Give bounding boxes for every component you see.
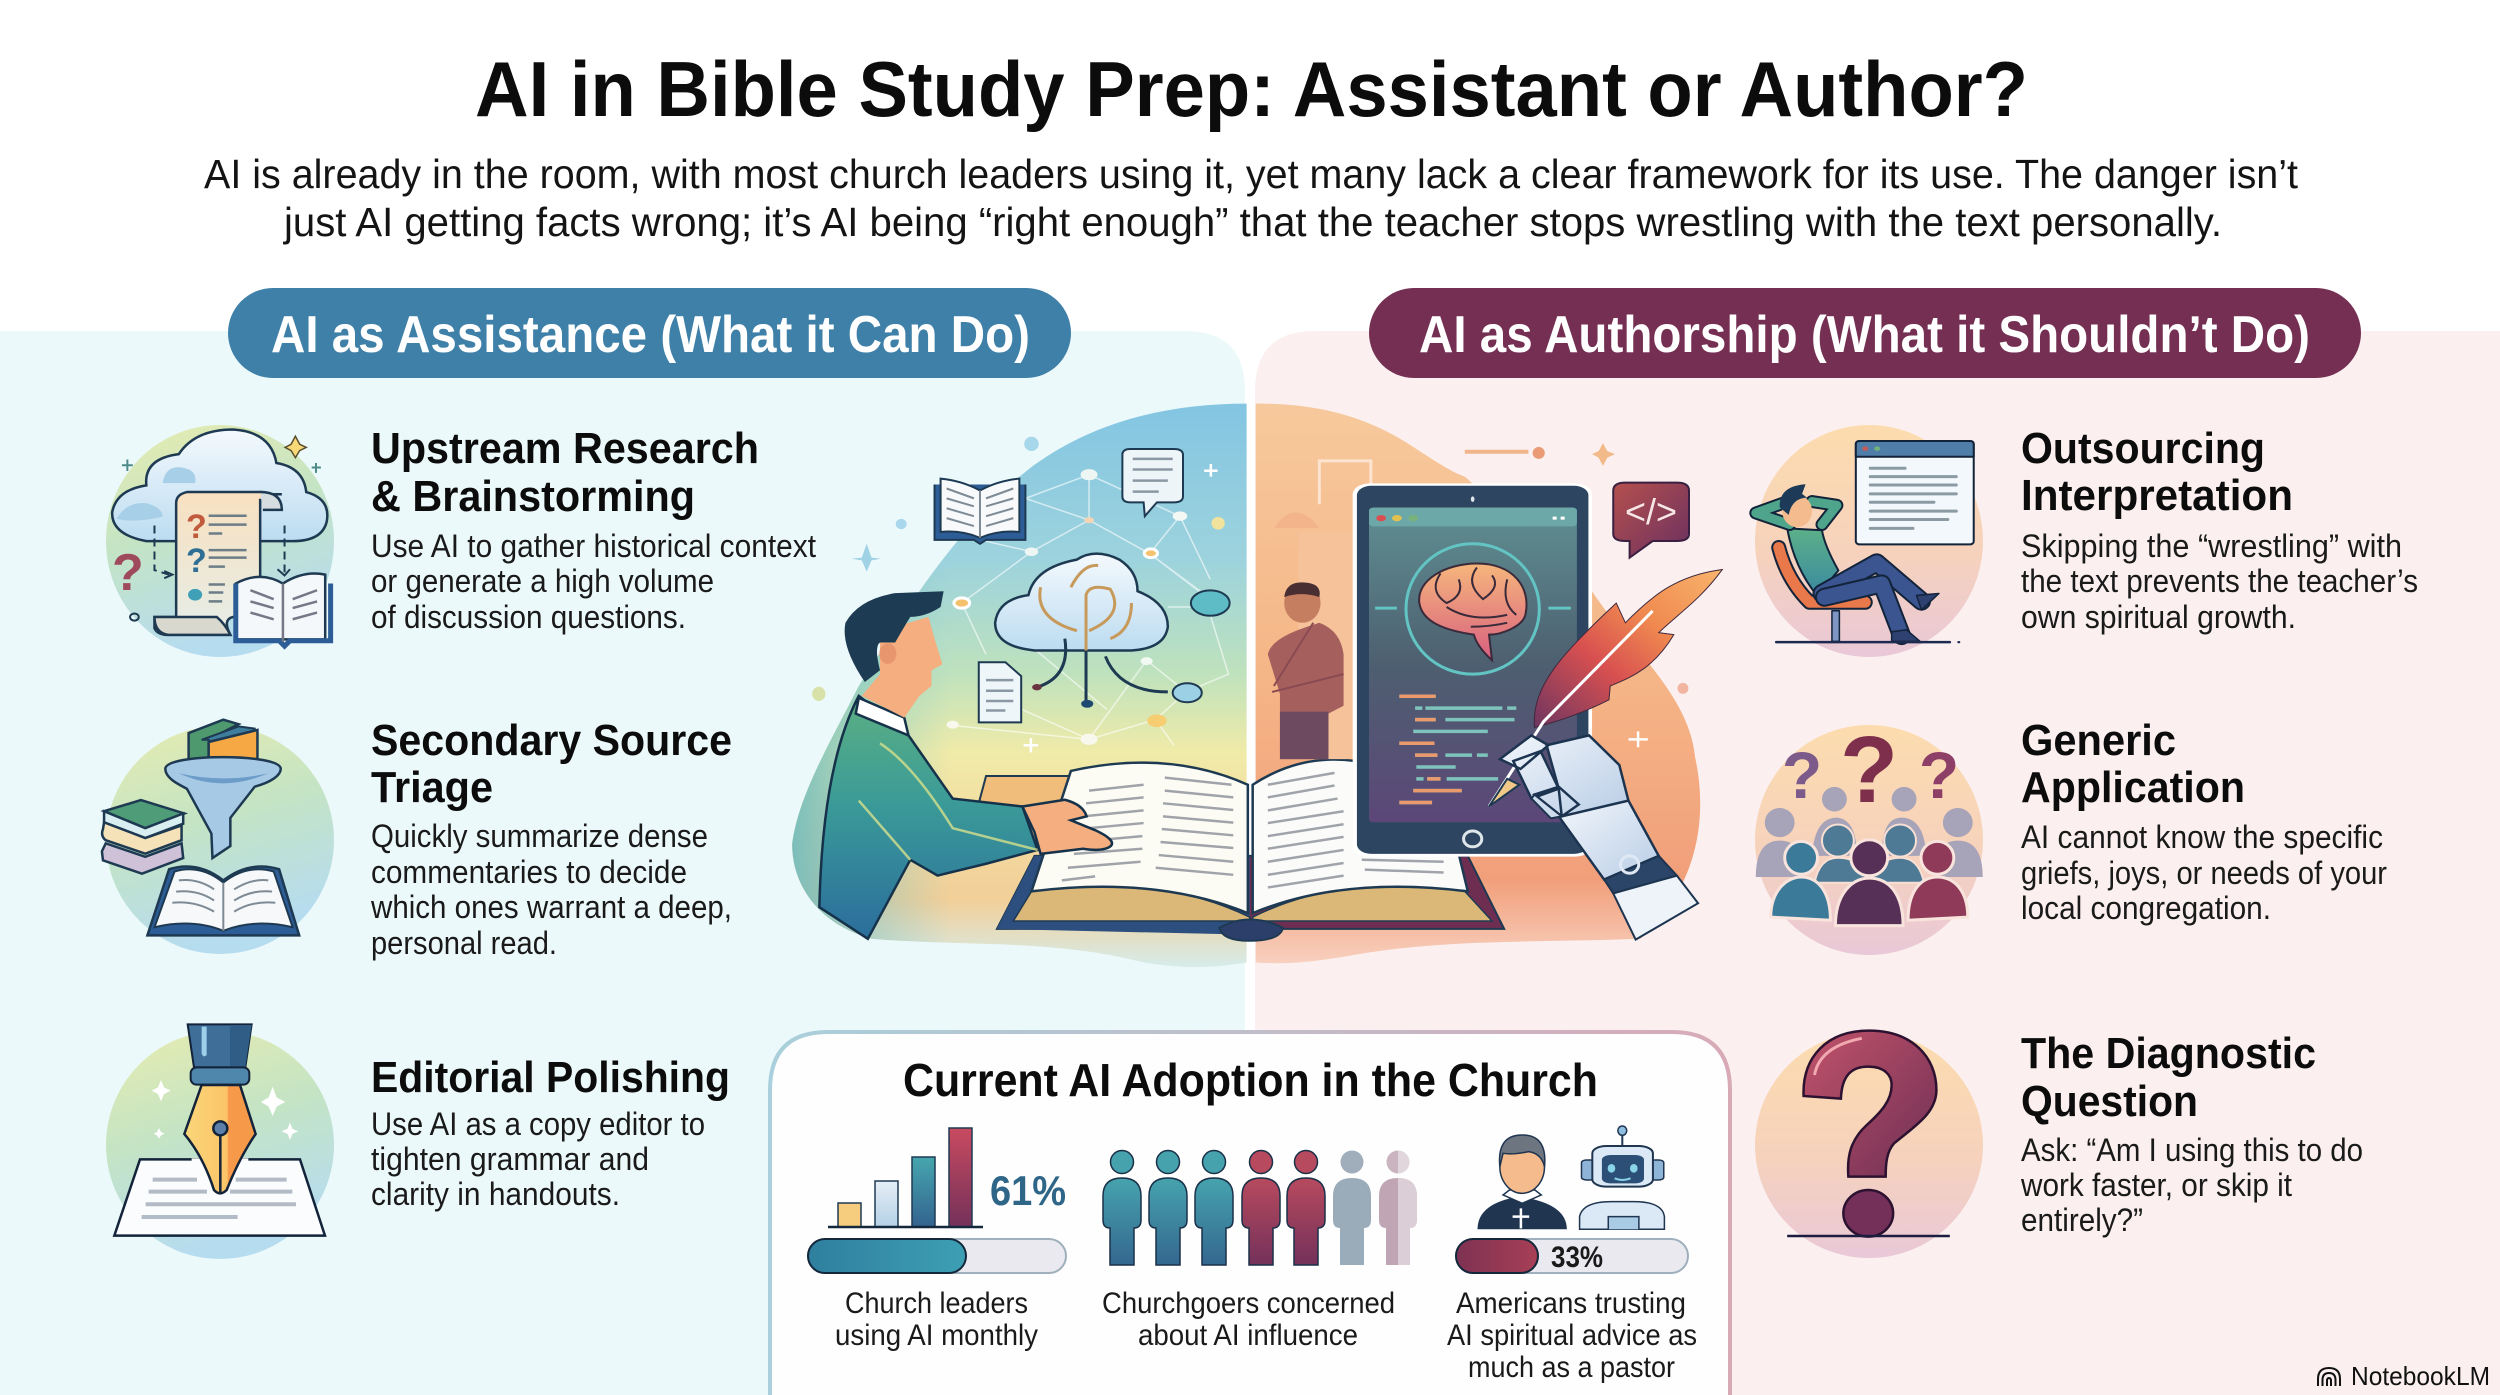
icon: funnel with books <box>102 720 334 954</box>
heading pill: AI as Authorship: AI as Authorship (What it Shouldn’t Do) <box>1419 306 2310 364</box>
icon: document <box>979 662 1021 722</box>
stat: Americans trusting AI 33%: much as a pastor <box>1468 1351 1675 1384</box>
text block: Generic Application <box>2021 716 2387 926</box>
icon: tablet with brain <box>1353 483 1592 857</box>
icon: code speech bubble <box>1613 483 1689 558</box>
subtitle text block <box>204 151 2299 245</box>
text block: Generic Application: local congregation. <box>2021 890 2271 926</box>
icon: chat bubble <box>1122 449 1183 516</box>
text block: Secondary Source Triage: Quickly summarize dense <box>371 818 708 854</box>
stat: church leaders 61%: 61% <box>990 1167 1066 1214</box>
text block: Generic Application: AI cannot know the specific <box>2021 819 2383 855</box>
text block: Editorial Polishing: Editorial Polishing <box>371 1053 730 1102</box>
text block: Outsourcing Interpretation: Outsourcing <box>2021 424 2265 473</box>
stat: Americans trusting AI 33%: 33% <box>1551 1241 1603 1274</box>
text block: Upstream Research: of discussion questions. <box>371 599 686 635</box>
stat: church leaders 61%: Church leaders <box>845 1287 1028 1320</box>
subtitle text block: AI is already in the room, with most church leaders using it, yet many lack a clear framework for its use. The danger isn’t <box>204 151 2299 197</box>
icon: congregation with question marks: ? <box>1782 738 1822 812</box>
stat: church leaders 61%: using AI monthly <box>835 1319 1038 1352</box>
text block: The Diagnostic Question: Ask: “Am I using this to do <box>2021 1132 2363 1168</box>
stat: churchgoers concerned pictogram: about AI influence <box>1138 1319 1358 1352</box>
text block: Secondary Source Triage: commentaries to decide <box>371 854 687 890</box>
heading pill: AI as Assistance: AI as Assistance (What it Can Do) <box>271 306 1030 364</box>
text block: Upstream Research: Upstream Research <box>371 424 759 473</box>
icon: fountain pen on paper <box>106 1024 334 1259</box>
text block: The Diagnostic Question: entirely?” <box>2021 1202 2143 1238</box>
icon: diagnostic question mark <box>1755 1031 1983 1258</box>
icon: relaxed person with document <box>1755 425 1983 657</box>
text block: Outsourcing Interpretation <box>2021 424 2418 635</box>
icon: open book floating <box>935 479 1025 544</box>
decorative sparks: authorship side <box>1465 443 1688 747</box>
text block: Secondary Source Triage: personal read. <box>371 925 557 961</box>
text block: The Diagnostic Question <box>2020 1029 2363 1238</box>
icon: congregation with question marks: ? <box>1919 738 1959 812</box>
icon: cloud research scroll: ? <box>186 542 207 580</box>
text block: Outsourcing Interpretation: own spiritual growth. <box>2021 599 2296 635</box>
text block: The Diagnostic Question: The Diagnostic <box>2021 1029 2316 1078</box>
icon: feather quill <box>1489 569 1722 806</box>
text block: Upstream Research: Use AI to gather historical context <box>371 528 816 564</box>
text block: Editorial Polishing: tighten grammar and <box>371 1141 649 1177</box>
background blob: authorship side <box>1256 404 1700 963</box>
panel: current AI adoption card <box>770 1032 1730 1395</box>
stat: Americans trusting AI 33%: AI spiritual advice as <box>1447 1319 1697 1352</box>
figure: thinking person silhouette <box>1268 461 1371 759</box>
central illustration: assistant and author: </> <box>1625 491 1677 532</box>
stat: churchgoers concerned pictogram: Churchgoers concerned <box>1102 1287 1395 1320</box>
icon: cloud with connections <box>995 554 1168 708</box>
text block: Secondary Source Triage <box>370 716 732 961</box>
text block: Outsourcing Interpretation: Interpretation <box>2021 471 2293 520</box>
central illustration: assistant and author <box>792 404 1722 967</box>
network graph <box>812 437 1230 752</box>
heading pill: AI as Authorship <box>1369 288 2361 378</box>
panel: authorship background <box>1255 331 2500 1395</box>
text block: Generic Application: griefs, joys, or needs of your <box>2021 855 2387 891</box>
text block: Secondary Source Triage: which ones warrant a deep, <box>370 889 732 925</box>
text block: Secondary Source Triage: Secondary Source <box>371 716 732 765</box>
text block: Editorial Polishing <box>371 1053 730 1212</box>
stat: Americans trusting AI 33% <box>1447 1126 1697 1384</box>
text block: Outsourcing Interpretation: the text prevents the teacher’s <box>2021 563 2418 599</box>
text block: Editorial Polishing: clarity in handouts. <box>371 1176 620 1212</box>
card heading: Current AI Adoption in the Church <box>903 1054 1598 1106</box>
text block: The Diagnostic Question: Question <box>2021 1077 2198 1126</box>
text block: Editorial Polishing: Use AI as a copy editor to <box>371 1106 705 1142</box>
icon: robot hand <box>1500 735 1698 940</box>
stat: churchgoers concerned pictogram <box>1102 1150 1417 1352</box>
text block: Generic Application: Generic <box>2021 716 2176 765</box>
background blob: assistance side <box>792 404 1247 967</box>
text block: Secondary Source Triage: Triage <box>371 763 493 812</box>
icon: congregation with question marks: ? <box>1840 717 1898 823</box>
text block: Generic Application: Application <box>2021 763 2245 812</box>
NotebookLM watermark: NotebookLM <box>2351 1361 2490 1391</box>
icon: congregation with question marks <box>1755 717 1983 955</box>
text block: Outsourcing Interpretation: Skipping the “wrestling” with <box>2021 528 2402 564</box>
open Bible <box>997 759 1504 941</box>
panel: assistance background <box>0 331 1245 1395</box>
icon: cloud research scroll: ? <box>112 544 144 602</box>
icon: cloud research scroll: ? <box>186 508 207 546</box>
text block: Upstream Research: or generate a high volume <box>371 563 714 599</box>
title: AI in Bible Study Prep: Assistant or Author? <box>475 45 2028 133</box>
stat: church leaders 61% <box>808 1128 1066 1352</box>
subtitle text block: just AI getting facts wrong; it’s AI being “right enough” that the teacher stops wrestling with the text personally. <box>283 199 2222 245</box>
figure: man studying <box>819 591 1071 939</box>
text block: Upstream Research: & Brainstorming <box>371 472 695 521</box>
text block: The Diagnostic Question: work faster, or skip it <box>2020 1167 2292 1203</box>
icon: cloud research scroll <box>106 425 334 657</box>
text block: Upstream Research <box>371 424 816 635</box>
stat: Americans trusting AI 33%: Americans trusting <box>1456 1287 1686 1320</box>
figure: man's hands on the page <box>1022 800 1112 854</box>
heading pill: AI as Assistance <box>228 288 1071 378</box>
